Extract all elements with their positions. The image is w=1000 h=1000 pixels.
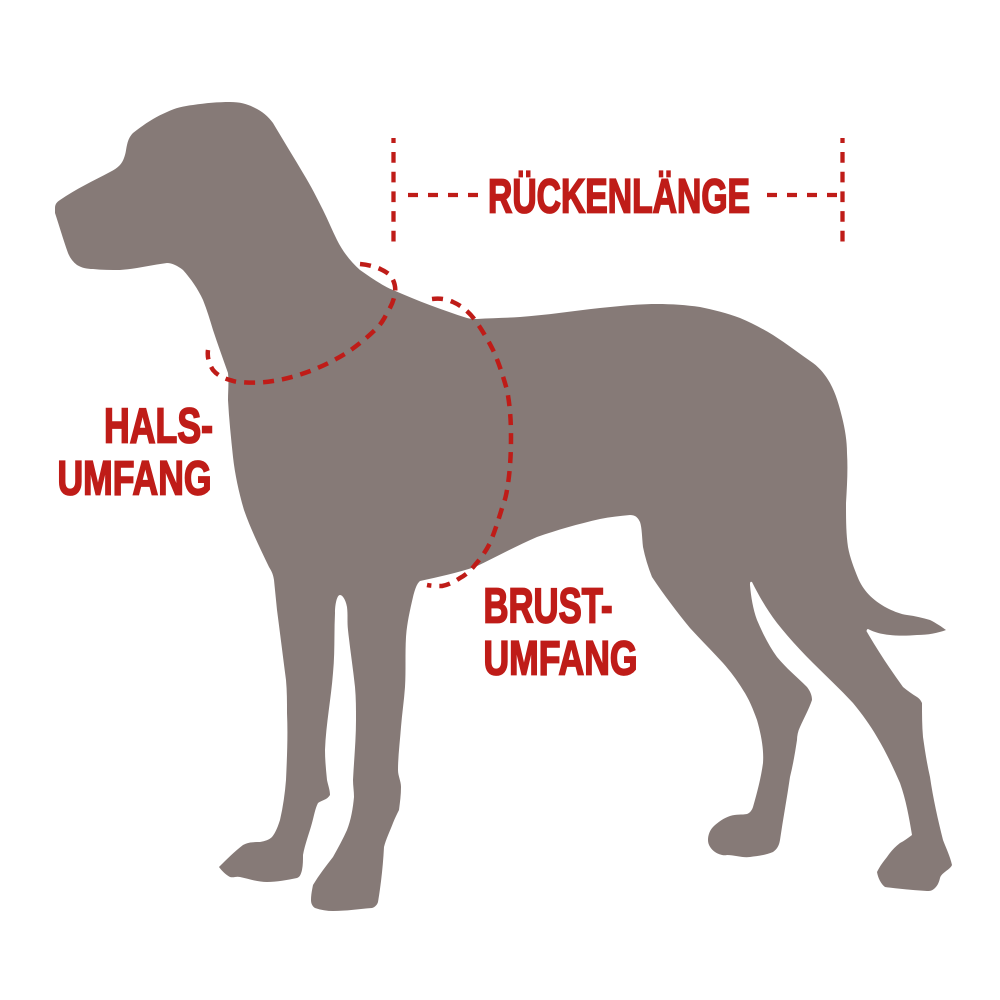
label: chest circumference: UMFANG [484, 632, 638, 686]
dog silhouette [55, 102, 952, 911]
left dash line [408, 193, 478, 197]
label: neck circumference: UMFANG [58, 452, 212, 506]
back length bracket [394, 138, 842, 244]
label: chest circumference: BRUST- [484, 580, 612, 634]
label: back length: RÜCKENLÄNGE [488, 170, 750, 224]
right dash line [767, 193, 842, 197]
right tick [840, 138, 845, 244]
chest measurement dashed loop [427, 299, 511, 586]
label: neck circumference [58, 400, 213, 506]
left tick [391, 138, 396, 244]
label: neck circumference: HALS- [104, 400, 213, 454]
label: chest circumference [484, 580, 638, 686]
neck measurement dashed loop [208, 264, 395, 383]
